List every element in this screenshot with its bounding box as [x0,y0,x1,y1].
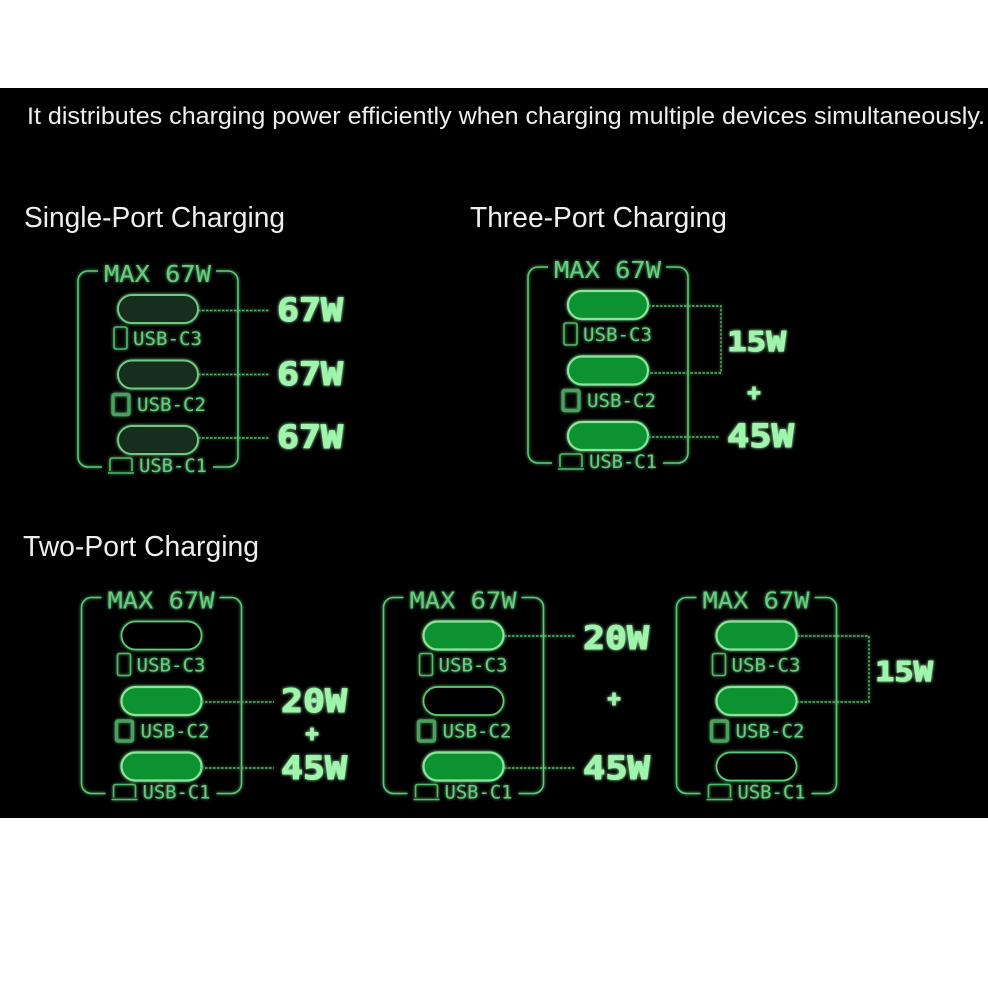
panel: two-port charging, C3 and C1 [384,588,651,804]
wattage: 45W: 45W [281,749,348,787]
port frame: USB-C1 [589,452,657,473]
port frame: MAX 67W [410,588,517,614]
wattage: 15W: 15W [875,655,933,688]
plus sign: + [305,722,319,747]
connector lines [201,702,274,768]
port frame: USB-C1 [142,782,210,804]
port frame: USB-C2 [140,722,210,742]
wattage: 67W: 67W [277,418,344,456]
port frame: USB-C3 [136,656,206,676]
wattage: 45W: 45W [727,417,795,455]
port frame: USB-C2 [736,722,804,742]
port frame: MAX 67W [104,262,211,288]
port frame: USB-C3 [438,656,508,676]
port frame: MAX 67W [108,588,215,614]
panel: single-port charging diagram [78,262,344,477]
port frame: USB-C3 [133,329,202,350]
port frame: USB-C2 [442,722,512,742]
connector lines [797,636,869,702]
wattage: 20W: 20W [583,619,650,657]
wattage: 67W: 67W [277,355,344,393]
port frame [82,588,242,804]
connector lines [504,636,576,768]
heading: single-port charging: Single-Port Charging [24,202,285,234]
heading: two-port charging: Two-Port Charging [23,531,259,563]
plus sign: + [607,687,621,712]
connector lines [198,310,270,438]
port frame: MAX 67W [702,588,810,614]
port frame: MAX 67W [554,258,661,284]
port frame [384,588,544,804]
panel: two-port charging, C2 and C1 [82,588,348,804]
black background panel [0,88,988,818]
plus sign: + [747,381,761,406]
port frame: USB-C1 [738,782,806,804]
port frame [676,588,836,804]
port frame: USB-C2 [587,391,656,412]
panel: three-port charging diagram [528,258,795,473]
port frame: USB-C1 [139,456,207,477]
port frame: USB-C2 [137,395,206,416]
port frame: USB-C3 [583,325,652,346]
title: It distributes charging power efficiently when charging multiple devices simultaneously. [27,103,985,130]
port frame [528,258,688,473]
wattage: 20W: 20W [281,682,348,720]
panel: two-port charging, C3 and C2 [676,588,933,804]
port frame: USB-C3 [732,656,800,676]
port frame: USB-C1 [444,782,512,804]
wattage: 15W: 15W [727,325,786,358]
wattage: 45W: 45W [583,749,651,787]
port frame [78,262,238,477]
heading: three-port charging: Three-Port Charging [470,202,727,234]
wattage: 67W: 67W [277,291,344,329]
connector lines [648,306,721,437]
